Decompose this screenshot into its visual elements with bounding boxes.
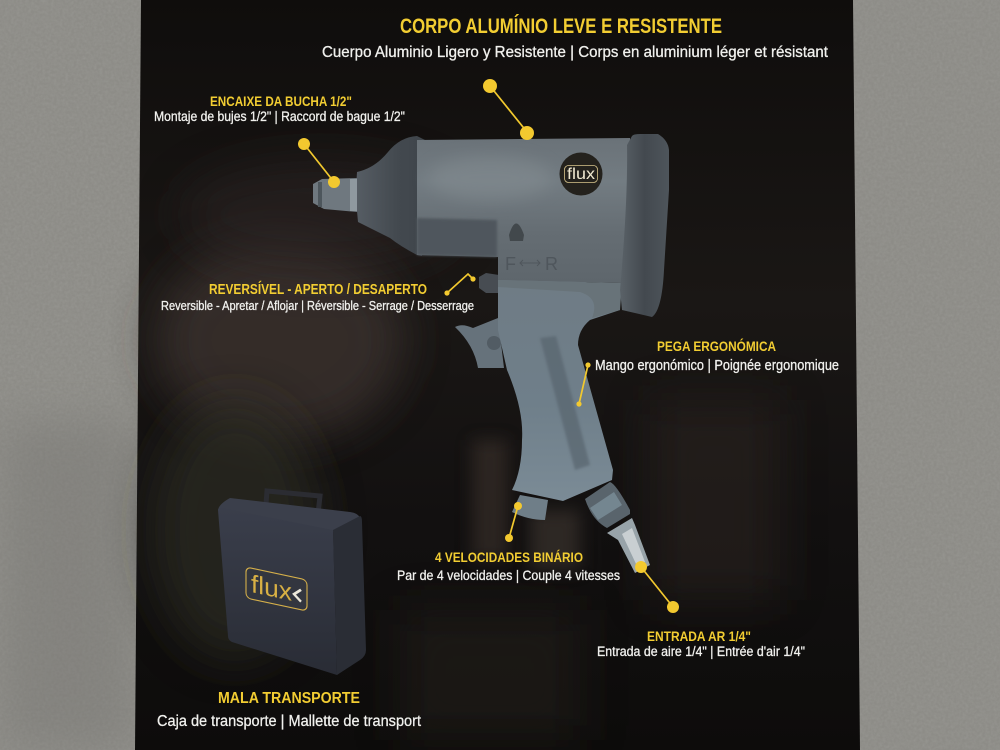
label: reversible <box>161 281 474 313</box>
label: air inlet: Entrada de aire 1/4" | Entrée d'air 1/4" <box>597 644 805 659</box>
heading: aluminium body <box>322 15 829 61</box>
reverse valve knob <box>479 273 499 293</box>
label: four speed torque: Par de 4 velocidades | Couple 4 vitesses <box>397 567 620 583</box>
selector slot <box>509 224 524 241</box>
callout: air inlet <box>635 561 679 613</box>
label: carrying case: MALA TRANSPORTE <box>218 690 360 707</box>
F R marking: F <box>505 254 516 274</box>
case side <box>333 516 366 675</box>
nose <box>356 136 425 256</box>
logo badge <box>560 152 602 196</box>
label: ergonomic handle <box>595 337 839 374</box>
carrying case illustration <box>218 491 366 675</box>
product box panel <box>135 0 860 750</box>
callout: chuck <box>298 138 340 188</box>
logo badge: flux <box>567 166 595 183</box>
label: four speed torque: 4 VELOCIDADES BINÁRIO <box>435 549 583 565</box>
label: carrying case <box>157 690 422 730</box>
label: chuck fitting: ENCAIXE DA BUCHA 1/2" <box>210 94 352 109</box>
callout: reversible <box>444 274 476 296</box>
air fitting <box>585 482 650 573</box>
F R marking <box>505 254 558 274</box>
F R marking: R <box>545 254 558 274</box>
handle darker inset <box>540 336 590 470</box>
label: chuck fitting <box>154 94 405 124</box>
label: ergonomic handle: PEGA ERGONÓMICA <box>657 337 776 354</box>
foot valve <box>512 495 548 520</box>
lower casing shoulder <box>498 280 622 318</box>
trigger <box>455 318 504 368</box>
label: reversible: Reversible - Apretar / Aflojar | Réversible - Serrage / Desserrage <box>161 299 474 313</box>
callout: body top <box>483 79 534 140</box>
case logo <box>246 567 307 611</box>
label: reversible: REVERSÍVEL - APERTO / DESAPERTO <box>209 281 427 298</box>
label: chuck fitting: Montaje de bujes 1/2" | Raccord de bague 1/2" <box>154 108 405 124</box>
label: carrying case: Caja de transporte | Mallette de transport <box>157 713 422 730</box>
callout: speed selector <box>505 502 522 542</box>
label: ergonomic handle: Mango ergonómico | Poignée ergonomique <box>595 358 839 374</box>
impact wrench illustration <box>313 134 669 573</box>
heading: aluminium body: CORPO ALUMÍNIO LEVE E RESISTENTE <box>400 15 722 38</box>
label: air inlet: ENTRADA AR 1/4" <box>647 628 751 644</box>
anvil square drive <box>313 178 357 212</box>
case front <box>218 508 337 675</box>
main body <box>417 138 630 283</box>
case top <box>218 498 360 532</box>
trigger pivot <box>487 336 501 350</box>
callout: handle <box>576 362 591 407</box>
label: air inlet <box>597 628 805 659</box>
rear cap <box>620 134 669 317</box>
case handle <box>266 491 320 514</box>
label: four speed torque <box>397 549 620 583</box>
handle <box>498 262 620 501</box>
textured highlight <box>428 156 552 200</box>
body shadow band <box>417 218 497 257</box>
case logo: flux <box>251 570 292 607</box>
glossy reflections <box>150 160 780 740</box>
heading: aluminium body: Cuerpo Aluminio Ligero y Resistente | Corps en aluminium léger et résistant <box>322 44 829 61</box>
